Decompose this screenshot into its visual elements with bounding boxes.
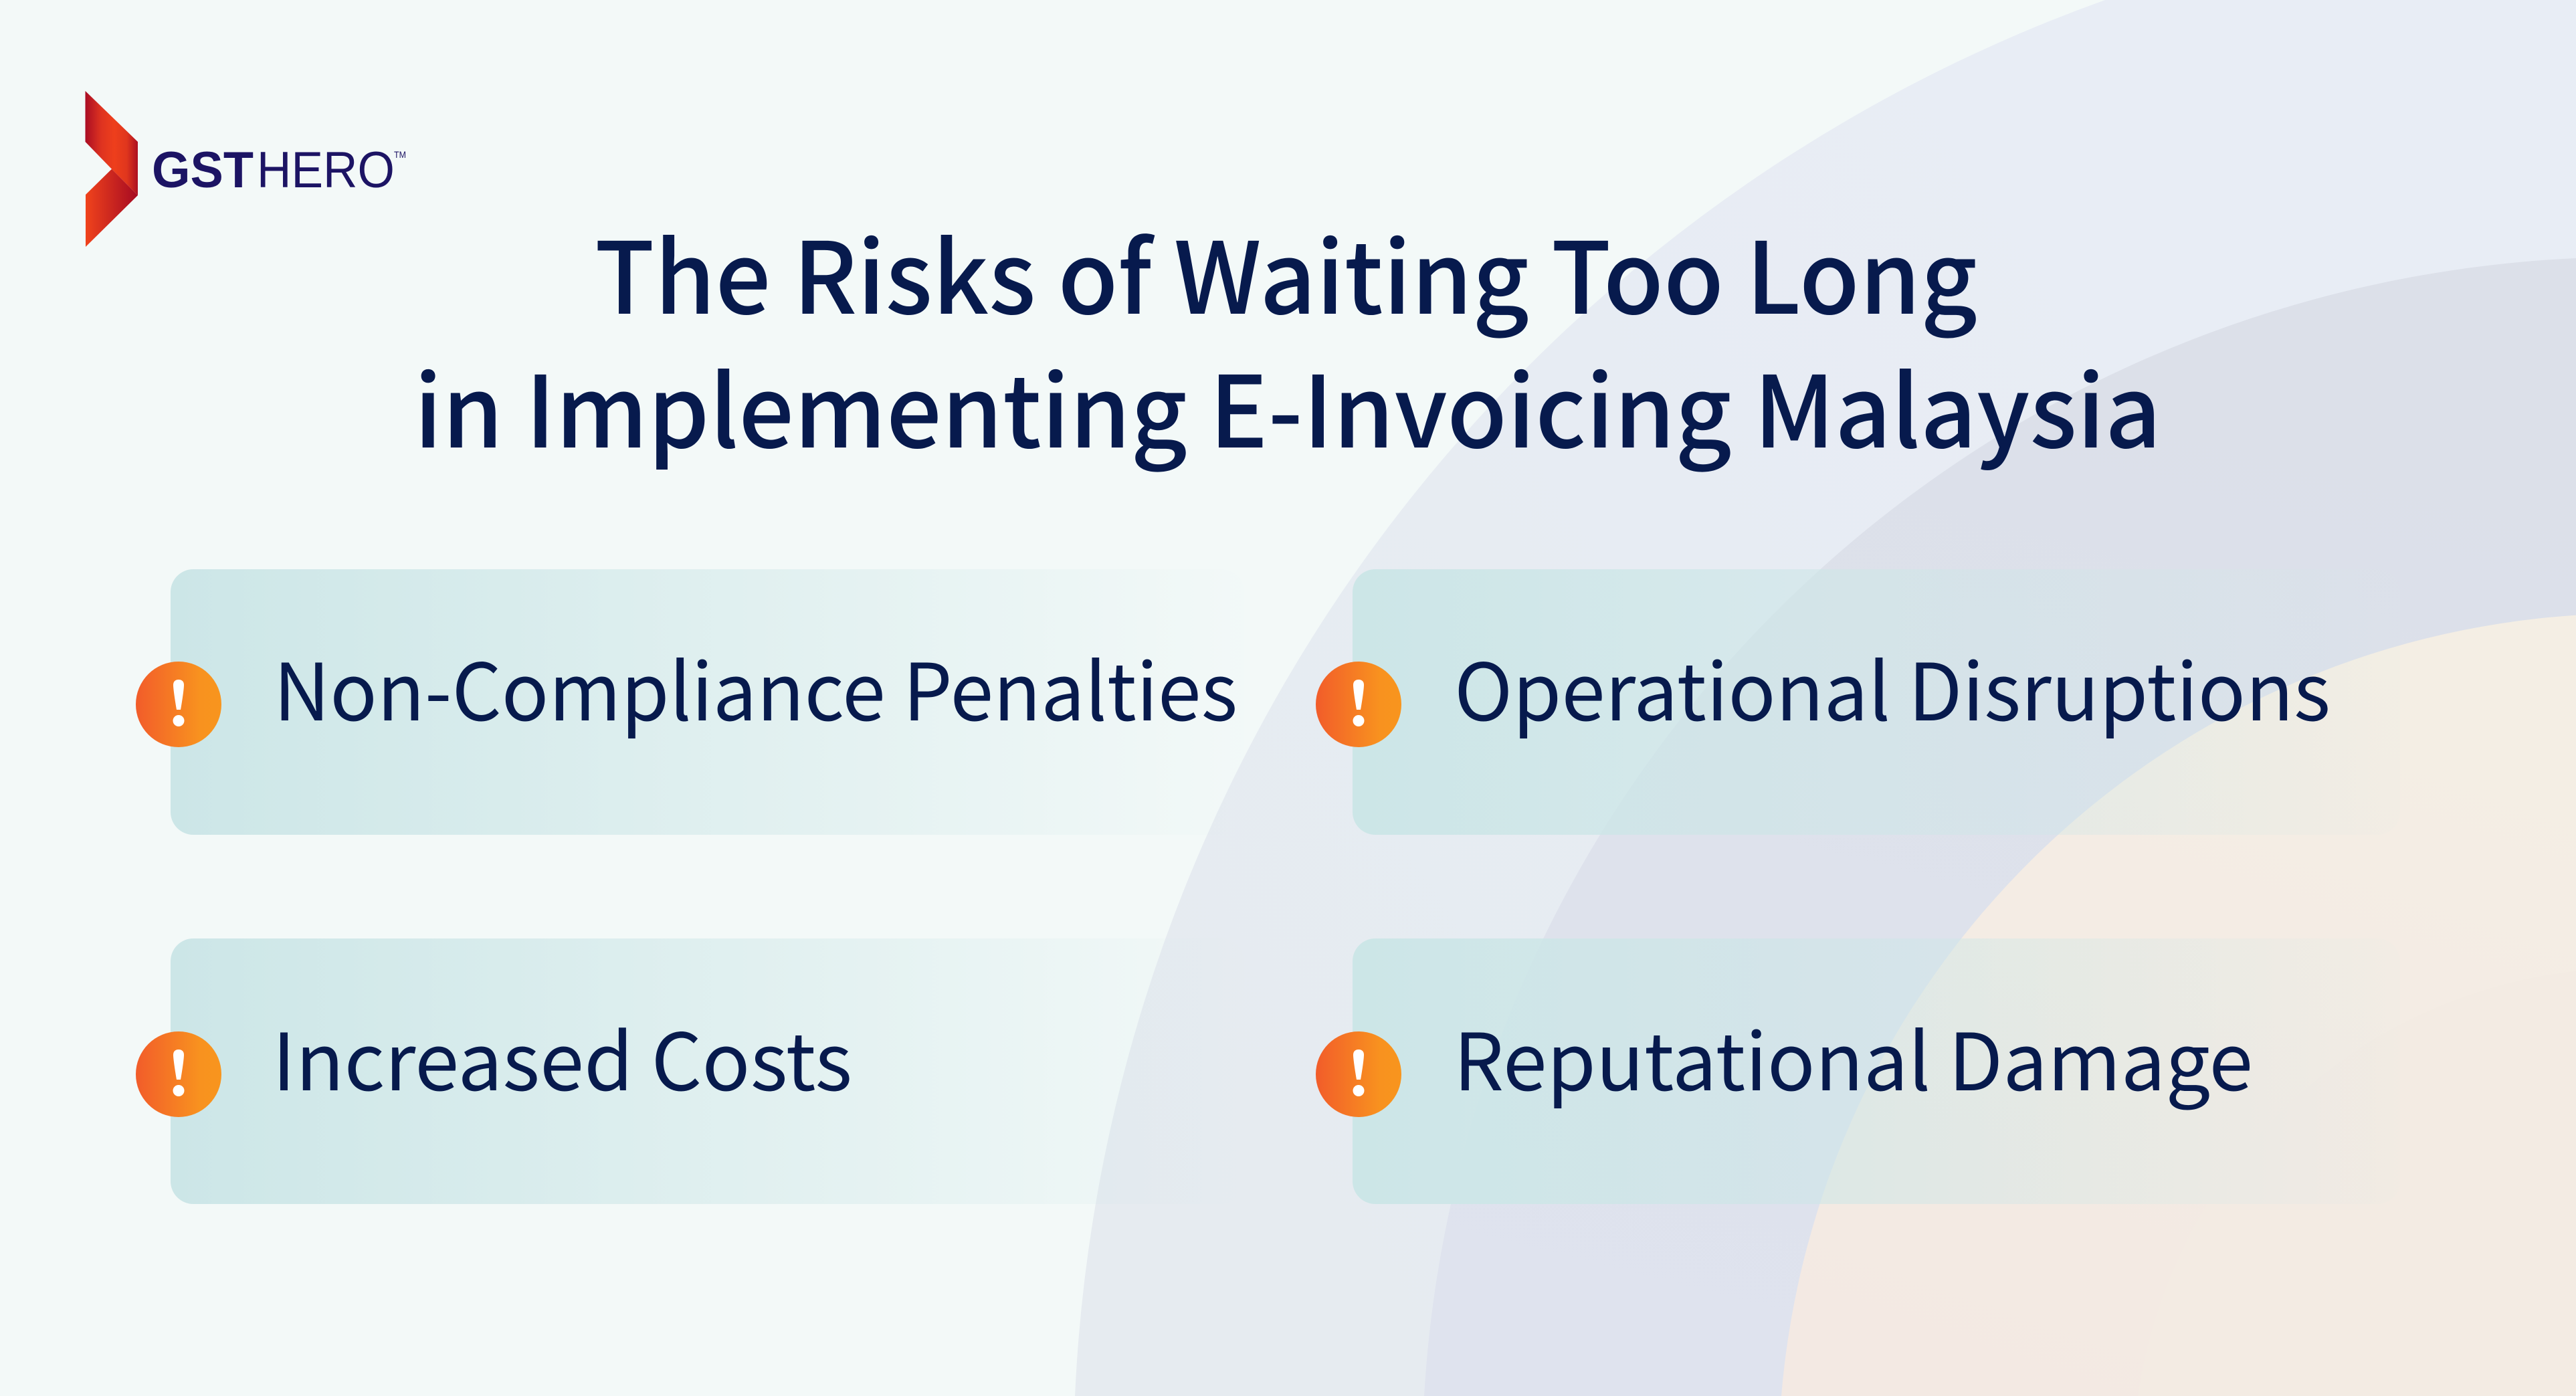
icon: warning <box>1316 1031 1401 1117</box>
logo wordmark: GST <box>152 142 254 199</box>
logo wordmark: HERO <box>257 142 395 199</box>
card background <box>171 569 1244 835</box>
logo wordmark <box>152 142 406 199</box>
label: Reputational Damage <box>1454 999 2253 1113</box>
card background <box>171 938 1244 1204</box>
panel: Non-Compliance Penalties <box>136 569 1244 835</box>
icon: warning <box>1316 662 1401 747</box>
background arc 4 <box>2138 971 2576 1396</box>
title <box>414 199 2161 476</box>
title: The Risks of Waiting Too Long <box>595 199 1977 342</box>
title: in Implementing E-Invoicing Malaysia <box>414 332 2161 476</box>
logo wordmark: TM <box>394 149 406 160</box>
background arc 3 <box>1781 615 2576 1396</box>
icon: warning <box>136 662 221 747</box>
card background <box>1353 938 2400 1204</box>
background arc 1 <box>1075 0 2576 1396</box>
panel: Operational Disruptions <box>1316 569 2400 835</box>
panel: Increased Costs <box>136 938 1244 1204</box>
icon: warning <box>136 1031 221 1117</box>
label: Increased Costs <box>272 999 852 1113</box>
background arc 2 <box>1424 258 2576 1396</box>
logo: GST Hero <box>86 91 406 247</box>
icon: logo chevron <box>86 91 138 247</box>
label: Non-Compliance Penalties <box>274 629 1237 743</box>
panel: Reputational Damage <box>1316 938 2400 1204</box>
card background <box>1353 569 2400 835</box>
label: Operational Disruptions <box>1454 629 2331 743</box>
